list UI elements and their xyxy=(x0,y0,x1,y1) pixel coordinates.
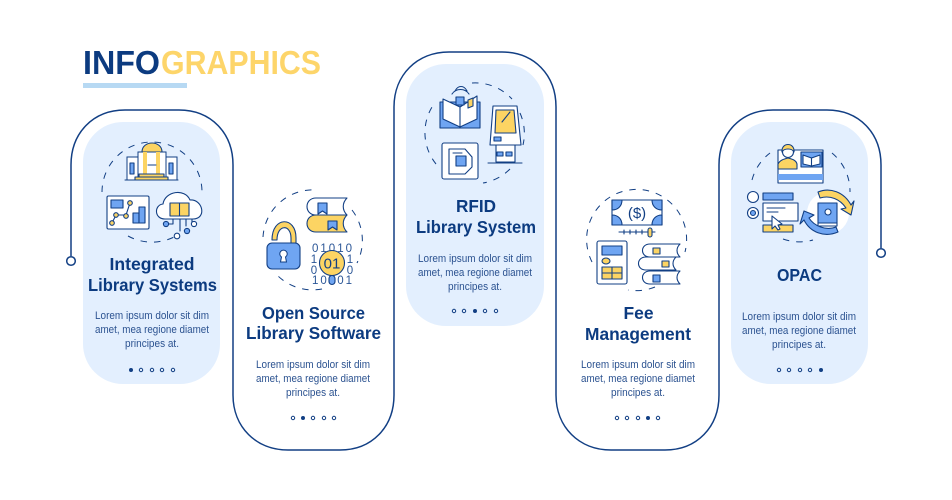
panel: filled card backgrounds xyxy=(83,64,868,384)
title xyxy=(83,44,321,88)
pagination dots xyxy=(129,368,175,372)
heading: Open Source xyxy=(262,303,365,323)
icon: lock and books: 01 xyxy=(324,256,340,272)
icon: librarian, search form and book exchange xyxy=(748,144,854,242)
title: INFO xyxy=(83,44,160,81)
text block: Lorem ipsum dolor sit dim xyxy=(581,359,695,371)
icon: RFID book, kiosk and chip xyxy=(425,83,524,183)
pagination dots xyxy=(452,309,498,313)
text block: principes at. xyxy=(286,387,340,399)
pagination dots xyxy=(291,416,336,420)
text block: amet, mea regione diamet xyxy=(742,325,856,337)
title: GRAPHICS xyxy=(161,44,321,81)
heading: Fee xyxy=(624,303,654,323)
icon: lock and books: 0 xyxy=(311,265,317,277)
panel: OPAC xyxy=(742,144,856,372)
heading xyxy=(585,303,691,344)
text block: principes at. xyxy=(611,387,665,399)
icon: lock and books: 10001 xyxy=(312,275,352,287)
icon: banknote, calculator and books: ($) xyxy=(628,205,646,222)
icon: lock and books: 01010 xyxy=(312,243,352,255)
text block: principes at. xyxy=(448,281,502,293)
icon: lock and books xyxy=(263,190,362,290)
pagination dots xyxy=(777,368,823,372)
text block xyxy=(581,359,695,399)
text block: amet, mea regione diamet xyxy=(418,267,532,279)
heading xyxy=(246,303,381,343)
pagination dots xyxy=(615,416,660,420)
icon: library and cloud xyxy=(102,142,202,242)
heading: Library Systems xyxy=(88,275,217,295)
panel: Fee Management xyxy=(581,189,695,420)
icon: banknote, calculator and books xyxy=(587,189,687,291)
text block: Lorem ipsum dolor sit dim xyxy=(418,253,532,265)
text block: amet, mea regione diamet xyxy=(95,324,209,336)
text block: Lorem ipsum dolor sit dim xyxy=(742,311,856,323)
connecting outline xyxy=(67,52,885,450)
heading: Integrated xyxy=(110,254,194,274)
text block xyxy=(95,310,209,350)
heading: Management xyxy=(585,324,691,344)
text block xyxy=(742,311,856,351)
icon: lock and books: 0 xyxy=(347,265,353,277)
text block xyxy=(418,253,532,293)
text block: amet, mea regione diamet xyxy=(256,373,370,385)
text block: amet, mea regione diamet xyxy=(581,373,695,385)
panel: Integrated Library Systems xyxy=(88,142,217,372)
text block: principes at. xyxy=(125,338,179,350)
heading: Library System xyxy=(416,217,536,237)
heading: Library Software xyxy=(246,323,381,343)
text block: Lorem ipsum dolor sit dim xyxy=(256,359,370,371)
text block: Lorem ipsum dolor sit dim xyxy=(95,310,209,322)
panel: RFID Library System xyxy=(416,83,536,313)
icon: lock and books: 1 xyxy=(347,254,353,266)
heading: RFID xyxy=(456,196,496,216)
text block xyxy=(256,359,370,399)
heading xyxy=(88,254,217,295)
panel: Open Source Library Software xyxy=(246,190,381,420)
icon: lock and books: 1 xyxy=(311,254,317,266)
text block: principes at. xyxy=(772,339,826,351)
heading: OPAC xyxy=(777,265,822,285)
heading xyxy=(416,196,536,237)
